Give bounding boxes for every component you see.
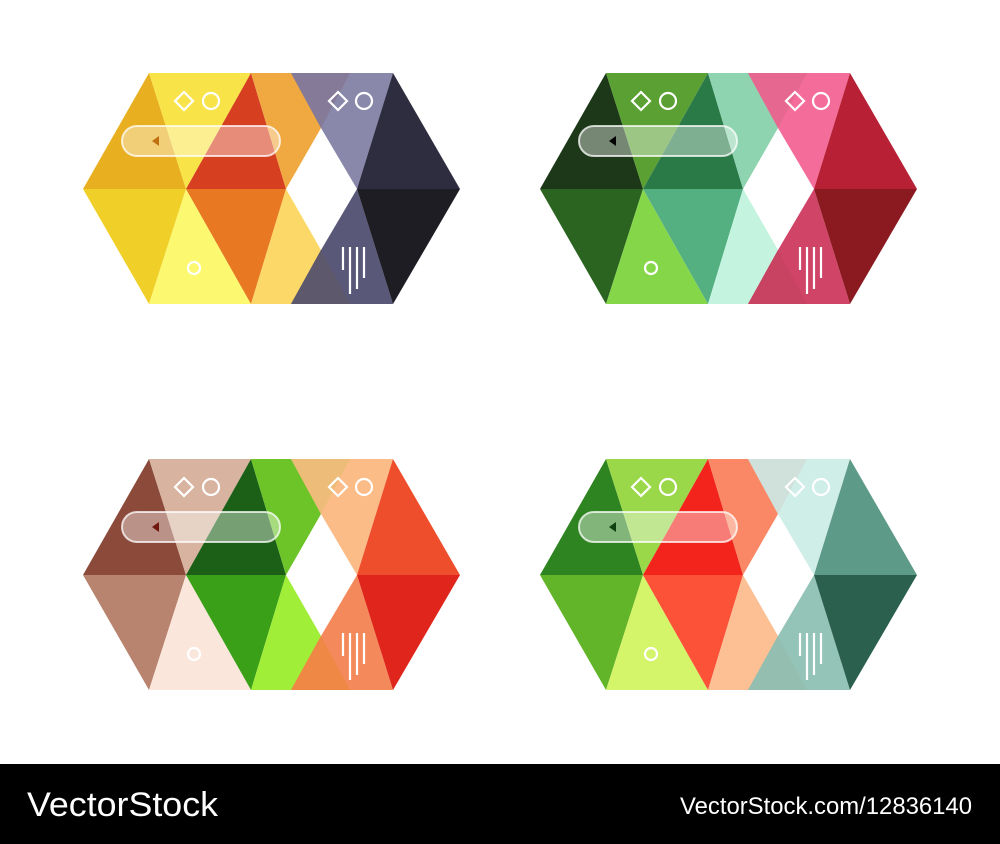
hexagon: yellow-orange-purple [83, 73, 460, 304]
footer bar [0, 764, 1000, 844]
footer url text: VectorStock.com/12836140 [680, 793, 972, 820]
footer logo text: VectorStock [27, 786, 219, 824]
hexagon: green-red-teal [540, 459, 917, 690]
hexagon: green-pink [540, 73, 917, 304]
hexagon: brown-green-orange [83, 459, 460, 690]
